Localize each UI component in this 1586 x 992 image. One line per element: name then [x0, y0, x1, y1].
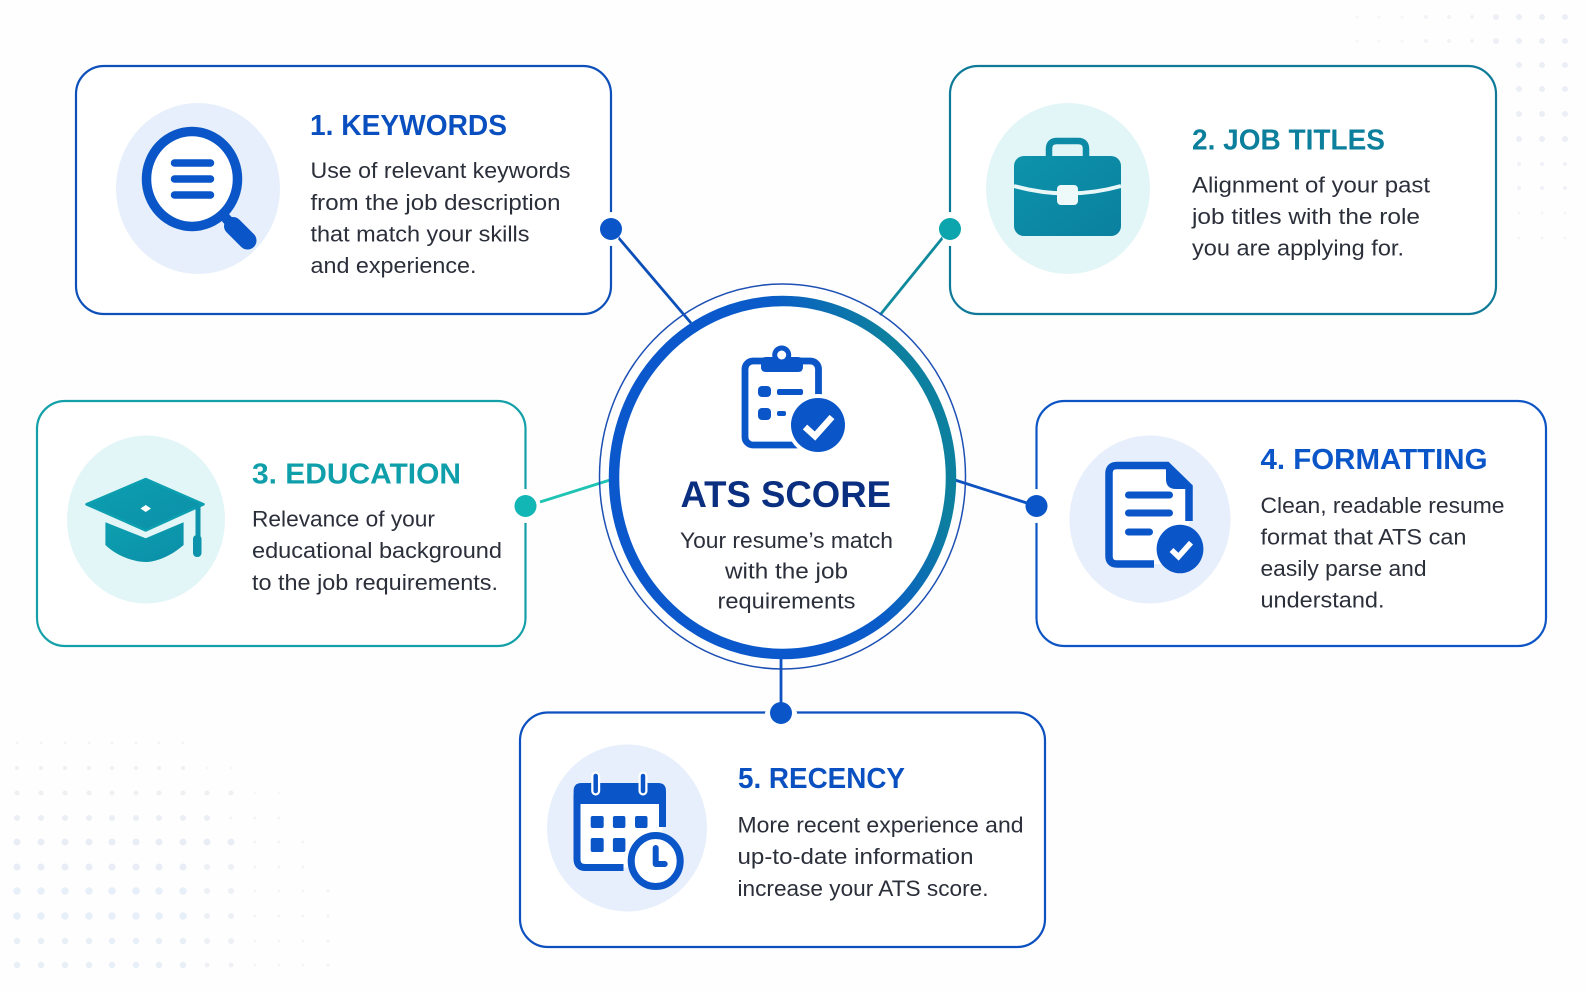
text: recency description	[738, 812, 1024, 901]
node: formatting	[1026, 489, 1048, 523]
text: education description	[252, 506, 502, 595]
node: recency	[765, 702, 797, 724]
icon: graduation cap	[67, 436, 225, 604]
text: keywords description: and experience.	[310, 253, 476, 278]
text: center description: with the job	[724, 558, 848, 584]
text: keywords description: Use of relevant keywords	[310, 158, 570, 183]
icon: calendar with clock	[547, 744, 707, 912]
text: recency description: up-to-date information	[738, 844, 974, 869]
connector: education to center	[540, 480, 610, 502]
icon: briefcase	[986, 103, 1150, 274]
node: education	[514, 489, 536, 523]
text: formatting description: understand.	[1260, 588, 1384, 612]
text: job titles description: Alignment of your past	[1192, 172, 1430, 198]
icon: clipboard with check	[745, 346, 849, 456]
text: recency description: More recent experience and	[738, 812, 1024, 838]
connector: recency to center	[780, 655, 782, 705]
panel: education	[37, 401, 526, 646]
connector: keywords to center	[617, 236, 691, 323]
text: center description: Your resume’s match	[680, 528, 893, 553]
heading: 4. FORMATTING: 4. FORMATTING	[1260, 444, 1488, 476]
heading: 3. EDUCATION: 3. EDUCATION	[252, 458, 461, 490]
text: formatting description	[1260, 493, 1504, 612]
center circle: ATS score	[600, 284, 966, 669]
text: keywords description: from the job description	[310, 190, 560, 215]
text: center description	[680, 528, 893, 614]
heading: 2. JOB TITLES: 2. JOB TITLES	[1192, 124, 1385, 156]
text: formatting description: easily parse and	[1260, 556, 1426, 581]
panel: job titles	[950, 66, 1496, 314]
text: formatting description: format that ATS can	[1260, 524, 1466, 550]
heading: 1. KEYWORDS: 1. KEYWORDS	[310, 110, 507, 142]
text: job titles description	[1191, 172, 1430, 260]
text: keywords description: that match your skills	[310, 222, 530, 246]
panel: recency	[520, 712, 1045, 947]
panel: keywords	[76, 66, 611, 314]
panel: formatting	[1036, 401, 1546, 646]
text: education description: to the job requirements.	[252, 570, 498, 595]
text: formatting description: Clean, readable resume	[1260, 493, 1504, 518]
text: recency description: increase your ATS score.	[738, 876, 988, 901]
icon: magnifying glass	[116, 103, 280, 274]
connector: job titles to center	[880, 236, 944, 315]
node: keywords	[600, 212, 622, 246]
text: center description: requirements	[718, 588, 856, 614]
text: job titles description: you are applying for.	[1192, 236, 1404, 260]
text: education description: Relevance of your	[252, 506, 435, 532]
heading: ATS SCORE: ATS SCORE	[680, 474, 891, 515]
connector: formatting to center	[955, 480, 1030, 504]
text: education description: educational background	[252, 538, 502, 563]
node: job titles	[939, 212, 961, 246]
heading: 5. RECENCY: 5. RECENCY	[738, 763, 905, 795]
icon: document with check	[1070, 436, 1230, 604]
text: keywords description	[310, 158, 570, 278]
text: job titles description: job titles with the role	[1191, 204, 1420, 229]
